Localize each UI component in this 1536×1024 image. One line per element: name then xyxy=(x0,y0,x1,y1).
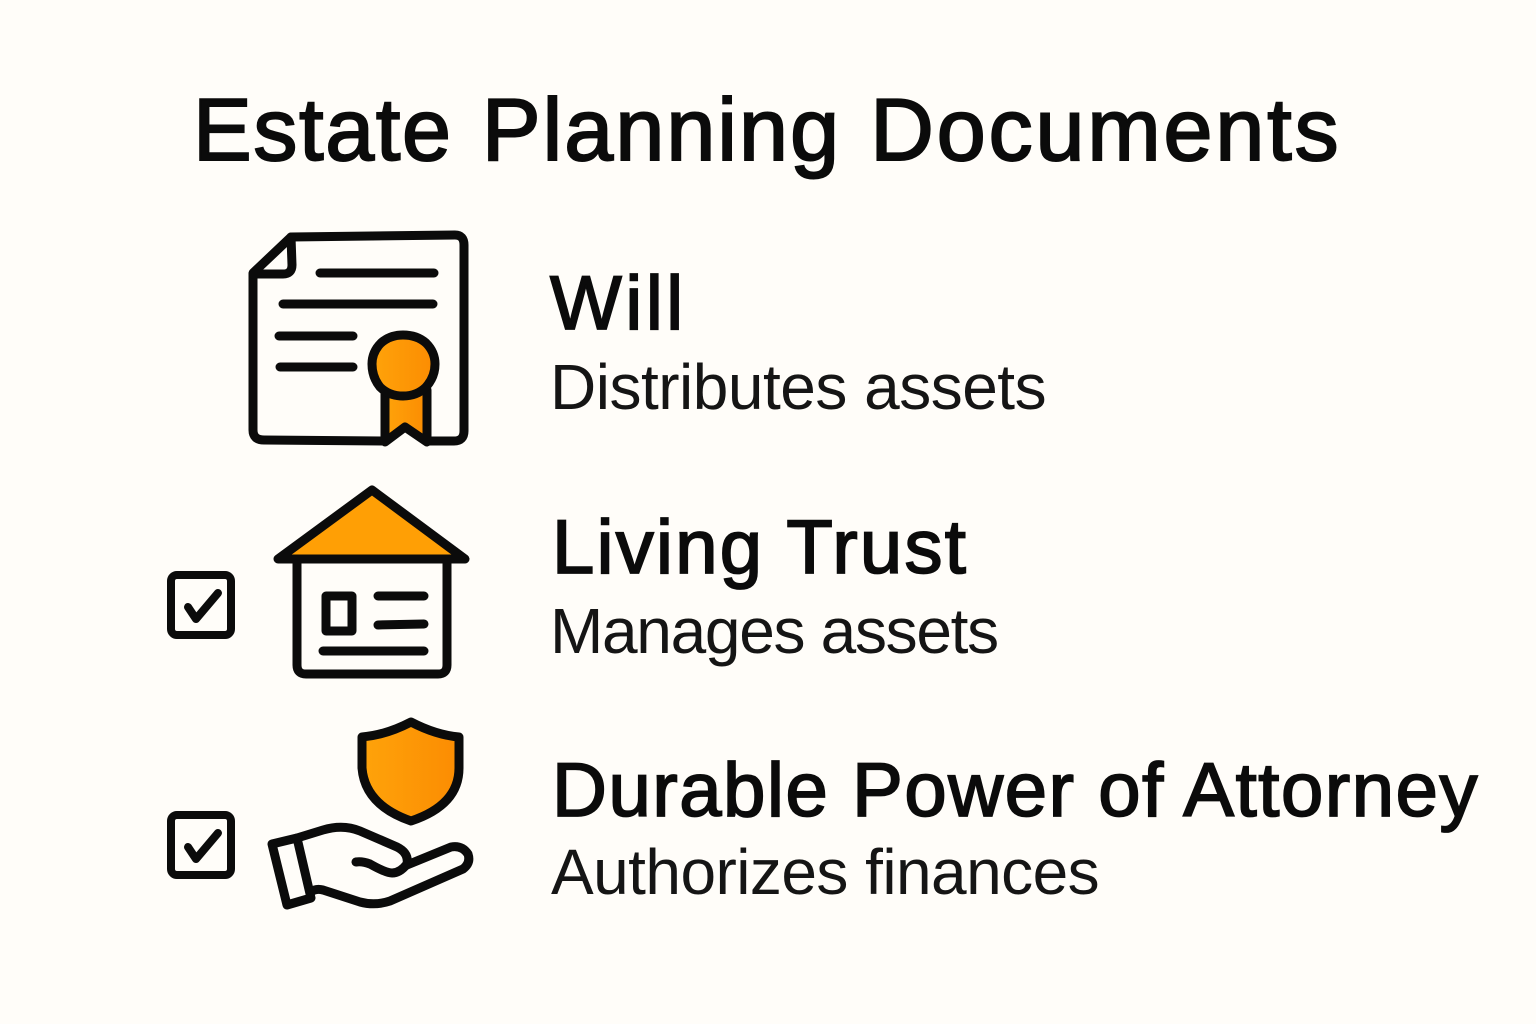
icon: shield above hand xyxy=(272,722,469,905)
text: Living Trust description: Manages assets xyxy=(550,595,998,667)
icon: house with document xyxy=(278,490,465,674)
checkbox: Durable Power of Attorney xyxy=(171,815,231,875)
icon: open hand xyxy=(272,827,469,905)
icon: will document with seal xyxy=(253,235,464,442)
checkbox: Living Trust xyxy=(171,575,231,635)
icon: orange seal ribbon xyxy=(372,335,435,442)
heading: Living Trust: Living Trust xyxy=(552,505,968,590)
text: Will description: Distributes assets xyxy=(550,351,1046,423)
text: Durable Power of Attorney description: Authorizes finances xyxy=(551,836,1099,908)
title: Estate Planning Documents xyxy=(193,80,1341,179)
heading: Will: Will xyxy=(550,261,687,346)
heading: Durable Power of Attorney: Durable Power of Attorney xyxy=(552,748,1479,833)
icon: orange shield xyxy=(362,722,459,821)
